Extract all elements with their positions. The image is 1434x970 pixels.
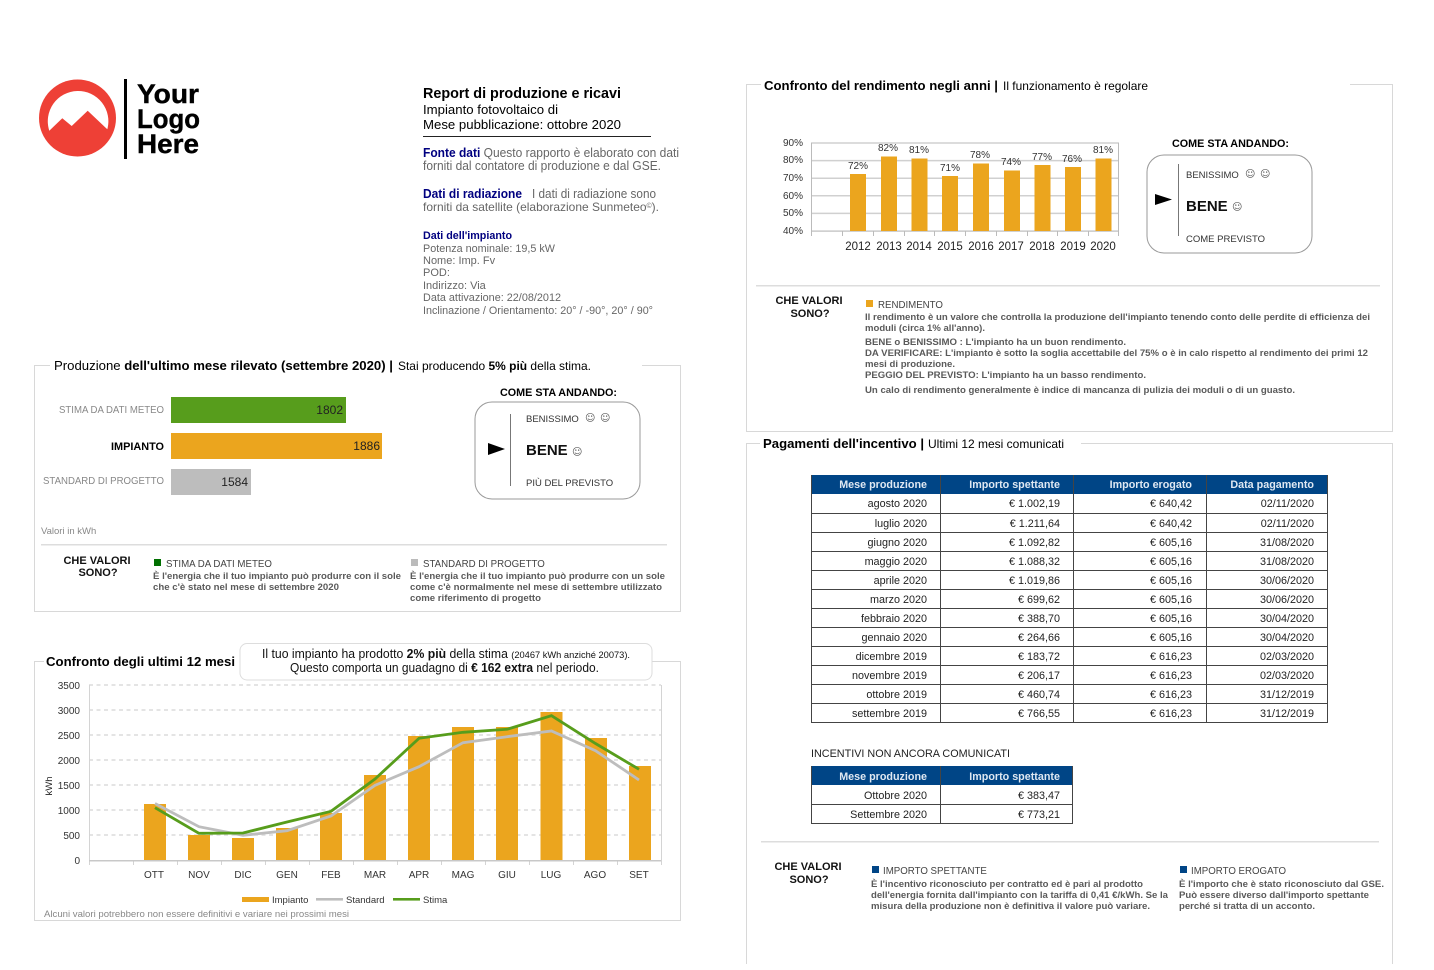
text block: dati di radiazione: Dati di radiazione — [423, 187, 522, 201]
text block: dati dell'impianto: Data attivazione: 22/08/2012 — [423, 292, 561, 304]
table: pagamenti ultimi 12 mesi: 31/08/2020 — [1260, 537, 1314, 549]
table: pagamenti ultimi 12 mesi: € 616,23 — [1150, 708, 1192, 720]
table: pagamenti ultimi 12 mesi: Mese produzione — [839, 479, 927, 491]
table: pagamenti ultimi 12 mesi: luglio 2020 — [875, 518, 927, 530]
panel: produzione ultimo mese — [34, 358, 680, 612]
status box: rendimento — [1147, 138, 1312, 253]
legend: rendimento che valori sono: Il rendimento è un valore che controlla la produzione dell'impianto tenendo conto delle perdite di efficienza dei — [865, 312, 1370, 323]
status box: rendimento: COME PREVISTO — [1186, 234, 1265, 245]
table: pagamenti ultimi 12 mesi: 02/03/2020 — [1260, 651, 1314, 663]
text block: dati dell'impianto: POD: — [423, 267, 450, 279]
bar chart: rendimento annuale: 2020 — [1090, 241, 1116, 253]
report heading: Mese pubblicazione: ottobre 2020 — [423, 117, 621, 132]
table: incentivi non comunicati — [811, 766, 1073, 824]
table: pagamenti ultimi 12 mesi: € 640,42 — [1150, 518, 1192, 530]
table: pagamenti ultimi 12 mesi: 02/11/2020 — [1261, 498, 1314, 510]
combo chart: produzione mensile: NOV — [188, 870, 210, 881]
text block: dati dell'impianto: Potenza nominale: 19,5 kW — [423, 243, 556, 255]
table: pagamenti ultimi 12 mesi: giugno 2020 — [868, 537, 927, 549]
bar chart: rendimento annuale — [783, 138, 1119, 253]
combo chart: produzione mensile: 2000 — [58, 756, 80, 767]
table: pagamenti ultimi 12 mesi: 30/04/2020 — [1260, 632, 1314, 644]
combo chart: produzione mensile: GIU — [498, 870, 516, 881]
legend: chart 12 mesi: Impianto — [272, 895, 308, 906]
legend: che valori sono — [63, 555, 665, 604]
bar chart: rendimento annuale: 60% — [783, 191, 803, 202]
panel: pagamenti incentivo — [746, 436, 1392, 964]
bar chart: rendimento annuale: 2015 — [937, 241, 963, 253]
report heading: Report di produzione e ricavi — [423, 85, 621, 102]
combo chart: produzione mensile: MAR — [364, 870, 386, 881]
text block: dati di radiazione — [423, 187, 659, 214]
heading: produzione — [54, 358, 591, 373]
heading: produzione: Stai producendo 5% più della stima. — [398, 359, 591, 373]
status box: come sta andando: PIÙ DEL PREVISTO — [526, 478, 613, 489]
combo chart: produzione mensile: 3500 — [58, 681, 80, 692]
status box: rendimento: COME STA ANDANDO: — [1172, 138, 1289, 150]
combo chart: produzione mensile: 500 — [63, 831, 80, 842]
heading: pagamenti: Ultimi 12 mesi comunicati — [928, 437, 1064, 451]
bar chart: rendimento annuale: 77% — [1032, 152, 1052, 163]
table: pagamenti ultimi 12 mesi: 31/12/2019 — [1260, 689, 1314, 701]
table: pagamenti ultimi 12 mesi: € 388,70 — [1018, 613, 1060, 625]
combo chart: produzione mensile: 1500 — [58, 781, 80, 792]
table: pagamenti ultimi 12 mesi: € 605,16 — [1150, 613, 1192, 625]
legend: che valori sono: come riferimento di progetto — [410, 593, 541, 604]
legend: rendimento che valori sono — [775, 295, 1370, 396]
table: pagamenti ultimi 12 mesi: settembre 2019 — [852, 708, 927, 720]
combo chart: produzione mensile: OTT — [144, 870, 164, 881]
bar chart: rendimento annuale: 81% — [909, 145, 929, 156]
legend: rendimento che valori sono: SONO? — [790, 308, 830, 320]
callout: 2% più della stima: Il tuo impianto ha prodotto 2% più della stima (20467 kWh anziché 20073). — [262, 647, 630, 661]
bar chart: produzione: STIMA DA DATI METEO — [59, 405, 164, 416]
table: pagamenti ultimi 12 mesi: 30/06/2020 — [1260, 594, 1314, 606]
panel: confronto ultimi 12 mesi — [34, 644, 680, 920]
table: incentivi non comunicati: Importo spettante — [969, 771, 1060, 783]
callout: 2% più della stima — [240, 644, 652, 680]
status box: rendimento: BENISSIMO — [1186, 170, 1239, 181]
legend: chart 12 mesi — [242, 895, 448, 906]
bar chart: rendimento annuale: 2014 — [906, 241, 932, 253]
status box: come sta andando — [475, 387, 640, 499]
heading: rendimento: Confronto del rendimento negli anni | — [764, 78, 998, 93]
table: pagamenti ultimi 12 mesi: € 183,72 — [1018, 651, 1060, 663]
table: pagamenti ultimi 12 mesi: ottobre 2019 — [866, 689, 927, 701]
table: pagamenti ultimi 12 mesi: Importo erogato — [1110, 479, 1192, 491]
legend: chart 12 mesi: Stima — [423, 895, 448, 906]
table: pagamenti ultimi 12 mesi: € 206,17 — [1018, 670, 1060, 682]
status box: come sta andando: ☺ — [585, 413, 595, 424]
legend: rendimento che valori sono: BENE o BENISSIMO : L'impianto ha un buon rendimento. — [865, 337, 1126, 348]
table: pagamenti ultimi 12 mesi: 31/12/2019 — [1260, 708, 1314, 720]
status box: rendimento: ☺ — [1232, 202, 1242, 213]
table: pagamenti ultimi 12 mesi: € 1.088,32 — [1009, 556, 1060, 568]
legend: pagamenti che valori sono: IMPORTO SPETTANTE — [883, 866, 987, 877]
table: pagamenti ultimi 12 mesi: € 1.211,64 — [1010, 518, 1060, 530]
table: pagamenti ultimi 12 mesi: 30/06/2020 — [1260, 575, 1314, 587]
status box: come sta andando: ☺ — [572, 447, 582, 458]
legend: che valori sono: CHE VALORI — [63, 555, 131, 567]
bar chart: rendimento annuale: 2016 — [968, 241, 994, 253]
bar chart: produzione: 1584 — [221, 475, 248, 489]
bar chart: rendimento annuale: 81% — [1093, 145, 1113, 156]
report heading: Impianto fotovoltaico di — [423, 102, 558, 117]
table: incentivi non comunicati: Mese produzione — [839, 771, 927, 783]
legend: pagamenti che valori sono: IMPORTO EROGATO — [1191, 866, 1287, 877]
table: pagamenti ultimi 12 mesi: € 616,23 — [1150, 670, 1192, 682]
status box: rendimento: ☺ — [1245, 169, 1255, 180]
bar chart: produzione: STANDARD DI PROGETTO — [43, 476, 164, 487]
table: pagamenti ultimi 12 mesi: gennaio 2020 — [862, 632, 927, 644]
bar chart: rendimento annuale: 82% — [878, 143, 898, 154]
combo chart: produzione mensile: 3000 — [58, 706, 80, 717]
logo: Logo — [137, 104, 200, 134]
text block: dati dell'impianto: Nome: Imp. Fv — [423, 255, 496, 267]
table: pagamenti ultimi 12 mesi: € 640,42 — [1150, 498, 1192, 510]
bar chart: rendimento annuale: 2018 — [1029, 241, 1055, 253]
bar chart: rendimento annuale: 40% — [783, 226, 803, 237]
legend: pagamenti che valori sono: misura della produzione non è definitiva il valore può variare. — [871, 901, 1150, 912]
heading: rendimento: Il funzionamento è regolare — [1003, 79, 1148, 93]
status box: come sta andando: COME STA ANDANDO: — [500, 387, 617, 399]
combo chart: produzione mensile: kWh — [44, 776, 55, 796]
legend: chart 12 mesi: Standard — [346, 895, 385, 906]
table: pagamenti ultimi 12 mesi: Data pagamento — [1230, 479, 1314, 491]
legend: rendimento che valori sono: CHE VALORI — [775, 295, 843, 307]
legend: rendimento che valori sono: moduli (circa 1% all'anno). — [865, 323, 985, 334]
table: incentivi non comunicati: Settembre 2020 — [850, 809, 927, 821]
bar chart: produzione: 1802 — [316, 403, 343, 417]
bar chart: rendimento annuale: 2012 — [845, 241, 871, 253]
legend: che valori sono: STIMA DA DATI METEO — [166, 559, 272, 570]
legend: che valori sono: come c'è normalmente nel mese di settembre utilizzato — [410, 582, 662, 593]
text block: dati di radiazione: ). — [652, 200, 659, 214]
legend: rendimento che valori sono: RENDIMENTO — [878, 300, 943, 311]
table: pagamenti ultimi 12 mesi: Importo spettante — [969, 479, 1060, 491]
table: pagamenti ultimi 12 mesi: € 1.092,82 — [1009, 537, 1060, 549]
legend: pagamenti che valori sono: CHE VALORI — [774, 861, 842, 873]
table: pagamenti ultimi 12 mesi: maggio 2020 — [865, 556, 927, 568]
combo chart: produzione mensile: DIC — [234, 870, 252, 881]
combo chart: produzione mensile — [44, 681, 662, 881]
legend: rendimento che valori sono: Un calo di rendimento generalmente è indice di mancanza di pulizia dei moduli o di un guasto. — [865, 385, 1295, 396]
table: incentivi non comunicati: € 383,47 — [1018, 790, 1060, 802]
bar chart: rendimento annuale: 90% — [783, 138, 803, 149]
report heading — [423, 85, 651, 137]
bar chart: rendimento annuale: 74% — [1001, 157, 1021, 168]
heading: produzione: Produzione dell'ultimo mese rilevato (settembre 2020) | — [54, 358, 393, 373]
combo chart: produzione mensile: FEB — [321, 870, 341, 881]
table: pagamenti ultimi 12 mesi: febbraio 2020 — [861, 613, 927, 625]
legend: pagamenti che valori sono: È l'importo che è stato riconosciuto dal GSE. — [1179, 879, 1384, 890]
table: pagamenti ultimi 12 mesi: novembre 2019 — [852, 670, 927, 682]
table: pagamenti ultimi 12 mesi: 02/03/2020 — [1260, 670, 1314, 682]
status box: come sta andando: BENISSIMO — [526, 414, 579, 425]
heading: confronto 12 mesi: Confronto degli ultimi 12 mesi — [46, 654, 235, 669]
combo chart: produzione mensile: MAG — [452, 870, 475, 881]
table: pagamenti ultimi 12 mesi: € 605,16 — [1150, 537, 1192, 549]
table: pagamenti ultimi 12 mesi: marzo 2020 — [870, 594, 927, 606]
logo — [39, 79, 200, 159]
text block: dati di radiazione: forniti da satellite (elaborazione Sunmeteo — [423, 200, 647, 214]
bar chart: produzione: 1886 — [353, 439, 380, 453]
bar chart: rendimento annuale: 71% — [940, 163, 960, 174]
table: pagamenti ultimi 12 mesi: € 605,16 — [1150, 575, 1192, 587]
legend: pagamenti che valori sono: È l'incentivo riconosciuto per contratto ed è pari al prodotto — [871, 879, 1143, 890]
bar chart: rendimento annuale: 2017 — [998, 241, 1024, 253]
table: pagamenti ultimi 12 mesi: 30/04/2020 — [1260, 613, 1314, 625]
combo chart: produzione mensile: LUG — [541, 870, 562, 881]
bar chart: produzione: Valori in kWh — [41, 526, 96, 537]
table: pagamenti ultimi 12 mesi: € 1.002,19 — [1009, 498, 1060, 510]
table: pagamenti ultimi 12 mesi: € 605,16 — [1150, 556, 1192, 568]
text block: fonte dati: forniti dal contatore di produzione e dal GSE. — [423, 159, 661, 173]
table: pagamenti ultimi 12 mesi: € 699,62 — [1018, 594, 1060, 606]
combo chart: produzione mensile: 2500 — [58, 731, 80, 742]
heading: rendimento — [764, 78, 1148, 93]
logo: Here — [137, 129, 199, 159]
text block: dati dell'impianto: Indirizzo: Via — [423, 280, 487, 292]
bar chart: rendimento annuale: 76% — [1062, 154, 1082, 165]
note: valori non definitivi: Alcuni valori potrebbero non essere definitivi e variare nei prossimi mesi — [44, 909, 349, 920]
bar chart: produzione — [41, 397, 382, 537]
text block: fonte dati: Fonte dati Questo rapporto è elaborato con dati — [423, 146, 679, 160]
legend: pagamenti che valori sono: perché si tratta di un acconto. — [1179, 901, 1315, 912]
text block: dati dell'impianto — [423, 230, 653, 317]
table: pagamenti ultimi 12 mesi: € 605,16 — [1150, 594, 1192, 606]
table: pagamenti ultimi 12 mesi: 02/11/2020 — [1261, 518, 1314, 530]
logo: Your — [137, 79, 200, 109]
panel: confronto rendimento — [746, 78, 1392, 432]
text block: dati di radiazione: © — [647, 202, 653, 210]
table: pagamenti ultimi 12 mesi: aprile 2020 — [874, 575, 927, 587]
table: pagamenti ultimi 12 mesi: € 616,23 — [1150, 651, 1192, 663]
combo chart: produzione mensile: 1000 — [58, 806, 80, 817]
table: pagamenti ultimi 12 mesi — [811, 475, 1328, 723]
table: pagamenti ultimi 12 mesi: € 264,66 — [1018, 632, 1060, 644]
heading: pagamenti: Pagamenti dell'incentivo | — [763, 436, 924, 451]
status box: rendimento: BENE — [1186, 198, 1228, 215]
legend: rendimento che valori sono: PEGGIO DEL PREVISTO: L'impianto ha un basso rendimento. — [865, 370, 1146, 381]
legend: pagamenti che valori sono: Può essere diverso dall'importo spettante — [1179, 890, 1369, 901]
legend: che valori sono: che c'è stato nel mese di settembre 2020 — [153, 582, 339, 593]
table: pagamenti ultimi 12 mesi: € 766,55 — [1018, 708, 1060, 720]
table: pagamenti ultimi 12 mesi: € 1.019,86 — [1009, 575, 1060, 587]
bar chart: produzione: IMPIANTO — [111, 441, 164, 453]
bar chart: rendimento annuale: 50% — [783, 208, 803, 219]
bar chart: rendimento annuale: 2013 — [876, 241, 902, 253]
bar chart: rendimento annuale: 78% — [970, 150, 990, 161]
legend: che valori sono: È l'energia che il tuo impianto può produrre con un sole — [410, 571, 665, 582]
legend: che valori sono: SONO? — [78, 567, 118, 579]
legend: rendimento che valori sono: DA VERIFICARE: L'impianto è sotto la soglia accettabile del 75% o è in calo rispetto al rendimento dei primi 12 — [865, 348, 1368, 359]
table: incentivi non comunicati: € 773,21 — [1018, 809, 1060, 821]
heading: incentivi non comunicati: INCENTIVI NON ANCORA COMUNICATI — [811, 748, 1010, 760]
table: pagamenti ultimi 12 mesi: dicembre 2019 — [856, 651, 927, 663]
text block: dati dell'impianto: Inclinazione / Orientamento: 20° / -90°, 20° / 90° — [423, 305, 653, 317]
heading: pagamenti — [763, 436, 1064, 451]
table: incentivi non comunicati: Ottobre 2020 — [864, 790, 927, 802]
callout: 2% più della stima: Questo comporta un guadagno di € 162 extra nel periodo. — [290, 661, 599, 675]
table: pagamenti ultimi 12 mesi: agosto 2020 — [868, 498, 927, 510]
combo chart: produzione mensile: AGO — [584, 870, 606, 881]
bar chart: rendimento annuale: 2019 — [1060, 241, 1086, 253]
legend: rendimento che valori sono: mesi di produzione. — [865, 359, 955, 370]
text block: dati di radiazione: I dati di radiazione sono — [532, 187, 656, 201]
status box: come sta andando: ☺ — [600, 413, 610, 424]
text block: dati dell'impianto: Dati dell'impianto — [423, 230, 512, 242]
bar chart: rendimento annuale: 70% — [783, 173, 803, 184]
status box: rendimento: ☺ — [1260, 169, 1270, 180]
bar chart: rendimento annuale: 72% — [848, 161, 868, 172]
legend: pagamenti che valori sono — [774, 861, 1384, 912]
table: pagamenti ultimi 12 mesi: € 605,16 — [1150, 632, 1192, 644]
legend: pagamenti che valori sono: dell'energia fornita dall'impianto con la tariffa di 0,41 €/kWh. Se la — [871, 890, 1169, 901]
table: pagamenti ultimi 12 mesi: € 616,23 — [1150, 689, 1192, 701]
table: pagamenti ultimi 12 mesi: € 460,74 — [1018, 689, 1060, 701]
legend: pagamenti che valori sono: SONO? — [789, 874, 829, 886]
combo chart: produzione mensile: GEN — [276, 870, 298, 881]
table: pagamenti ultimi 12 mesi: 31/08/2020 — [1260, 556, 1314, 568]
combo chart: produzione mensile: SET — [629, 870, 649, 881]
combo chart: produzione mensile: APR — [409, 870, 429, 881]
combo chart: produzione mensile: 0 — [74, 856, 80, 867]
status box: come sta andando: BENE — [526, 442, 568, 459]
legend: che valori sono: STANDARD DI PROGETTO — [423, 559, 545, 570]
bar chart: rendimento annuale: 80% — [783, 155, 803, 166]
text block: fonte dati — [423, 146, 679, 173]
legend: che valori sono: È l'energia che il tuo impianto può produrre con il sole — [153, 571, 401, 582]
